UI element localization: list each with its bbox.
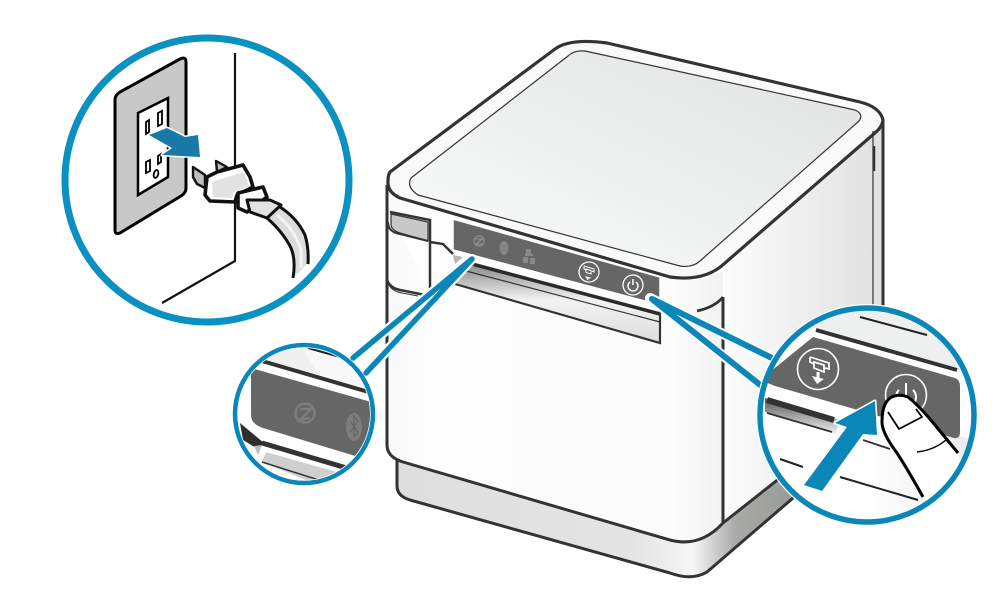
icon: power status close-up: [296, 404, 314, 422]
finger: [880, 394, 960, 502]
slot close-up: [765, 398, 840, 434]
panel close-up: [251, 369, 370, 456]
power plug: [193, 161, 308, 278]
wall corner lines: [162, 53, 235, 303]
arrow: press direction: [804, 401, 877, 491]
printer body outlines: [387, 120, 883, 542]
plug body: [205, 165, 253, 202]
pointer: left callout: [353, 259, 472, 373]
icon: bluetooth: [500, 241, 508, 255]
left cover hinge: [387, 212, 463, 296]
icon: power status: [474, 236, 484, 246]
arrow: pull out: [149, 128, 200, 157]
outlet: [138, 98, 168, 195]
printer top lid: [388, 41, 883, 278]
paper exit strip: [455, 264, 660, 343]
printer front: [387, 185, 723, 542]
plug neck: [247, 200, 281, 218]
icon: network: [523, 249, 535, 264]
control panel: [453, 219, 660, 305]
callout: press power button: [756, 304, 978, 526]
panel close-up: [760, 337, 960, 438]
right cover notch: [697, 297, 723, 311]
power cord: [267, 207, 308, 278]
right side seam: [872, 131, 874, 312]
printer right side: [720, 122, 883, 523]
icon: feed button: [579, 262, 599, 282]
callout: unplug from wall outlet: [65, 38, 349, 322]
icon: feed button close-up: [798, 348, 838, 390]
icon: bluetooth close-up: [346, 413, 362, 441]
plug prongs: [193, 167, 205, 188]
icon: power button close-up: [884, 374, 928, 408]
printer base: [397, 440, 800, 577]
lid inner panel: [410, 51, 861, 266]
callout: status indicators magnified: [233, 340, 375, 486]
icon: power button: [623, 275, 643, 295]
pointer: right callout: [650, 298, 778, 388]
wall plate: [115, 58, 186, 234]
plug collar: [238, 187, 267, 212]
printer: [387, 41, 883, 577]
